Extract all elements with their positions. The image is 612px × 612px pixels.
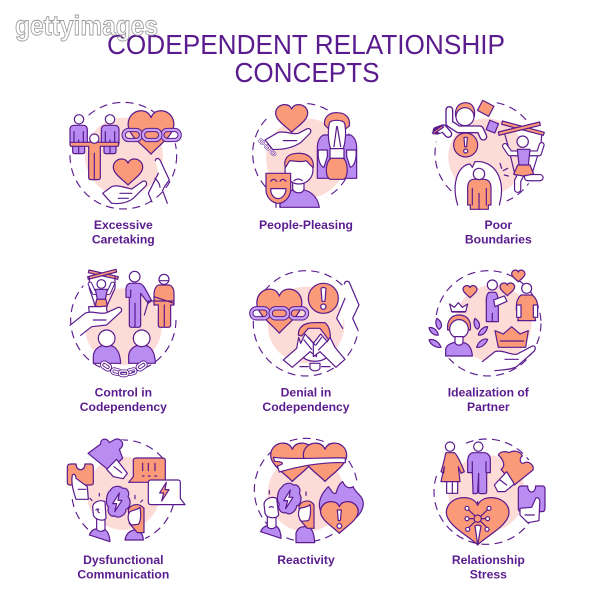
label: Idealization of: [448, 386, 530, 400]
title: CONCEPTS: [234, 57, 380, 88]
icon: three people: [70, 115, 119, 180]
label: Communication: [77, 567, 169, 581]
icon: tied person: [148, 274, 174, 327]
icon: man with rope: [126, 271, 152, 327]
icon: man with mask: [266, 153, 319, 207]
icon: heart in hand: [103, 159, 147, 204]
panel: denial in codependency: [248, 271, 363, 414]
label: Denial in: [281, 386, 331, 400]
panel: excessive caretaking: [62, 102, 183, 246]
icon: person in arch: [455, 162, 508, 209]
icon: crowned person with laurels: [429, 303, 488, 356]
panel: relationship stress: [432, 438, 545, 581]
label: [465, 218, 532, 246]
title: [107, 29, 505, 88]
icon: exclamation: [308, 283, 338, 313]
label: Partner: [467, 400, 510, 414]
icon: hearts with band: [271, 443, 347, 481]
label: [80, 386, 167, 414]
watermark: gettyimages: [15, 10, 158, 41]
icon: exclamation: [454, 133, 478, 157]
icon: couple: [486, 280, 538, 322]
icon: raised hand: [337, 281, 359, 329]
label: Poor: [484, 218, 512, 232]
icon: split laced heart: [446, 498, 509, 545]
icon: man: [468, 442, 490, 494]
icon: crown in hand: [482, 327, 535, 371]
label: Control in: [95, 386, 152, 400]
icon: raised hand: [148, 158, 169, 203]
icon: stressed brain cloud: [90, 486, 143, 517]
label: Reactivity: [277, 553, 335, 567]
label: Caretaking: [92, 232, 155, 246]
panel: poor boundaries: [428, 100, 545, 246]
icon: flaming heart: [319, 482, 363, 533]
panel: people-pleasing: [253, 100, 357, 232]
icon: chained heart: [251, 289, 307, 333]
icon: person covering face: [283, 323, 345, 371]
label: [448, 386, 530, 414]
title: CODEPENDENT RELATIONSHIP: [107, 29, 505, 60]
label: Boundaries: [465, 232, 532, 246]
icon: chained heart: [124, 111, 180, 154]
label: [452, 553, 525, 581]
label: [77, 553, 169, 581]
label: Relationship: [452, 553, 525, 567]
icon: arguing pair: [89, 501, 144, 542]
icon: overwhelmed person: [432, 100, 499, 137]
panel: dysfunctional communication: [63, 439, 185, 581]
icon: orange puzzle with hand: [494, 451, 533, 492]
icon: purple puzzle in hand: [88, 439, 127, 479]
label: People-Pleasing: [259, 218, 353, 232]
icon: stressed brain cloud: [269, 483, 306, 514]
icon: marionette: [498, 121, 544, 189]
label: Stress: [470, 567, 507, 581]
icon: woman from behind: [317, 113, 357, 179]
label: [92, 218, 155, 246]
panel: idealization of partner: [428, 270, 541, 414]
panel: control in codependency: [70, 263, 182, 414]
icon: arguing pair: [261, 497, 315, 543]
icon: purple puzzle with hand: [518, 486, 545, 523]
icon: woman: [441, 442, 464, 493]
label: [262, 386, 350, 414]
icon: white speech bubble with bolt: [148, 480, 185, 505]
label: Excessive: [94, 218, 153, 232]
icon: marionette on hand: [70, 269, 122, 335]
panel: reactivity: [254, 438, 363, 567]
icon: hearts: [463, 270, 525, 298]
label: Dysfunctional: [83, 553, 164, 567]
icon: chained pair: [93, 330, 155, 376]
label: Codependency: [80, 400, 167, 414]
icon: orange speech bubble: [129, 458, 165, 482]
icon: orange puzzle in hand: [67, 464, 93, 499]
label: Codependency: [262, 400, 350, 414]
icon: heart in hand: [259, 105, 311, 156]
